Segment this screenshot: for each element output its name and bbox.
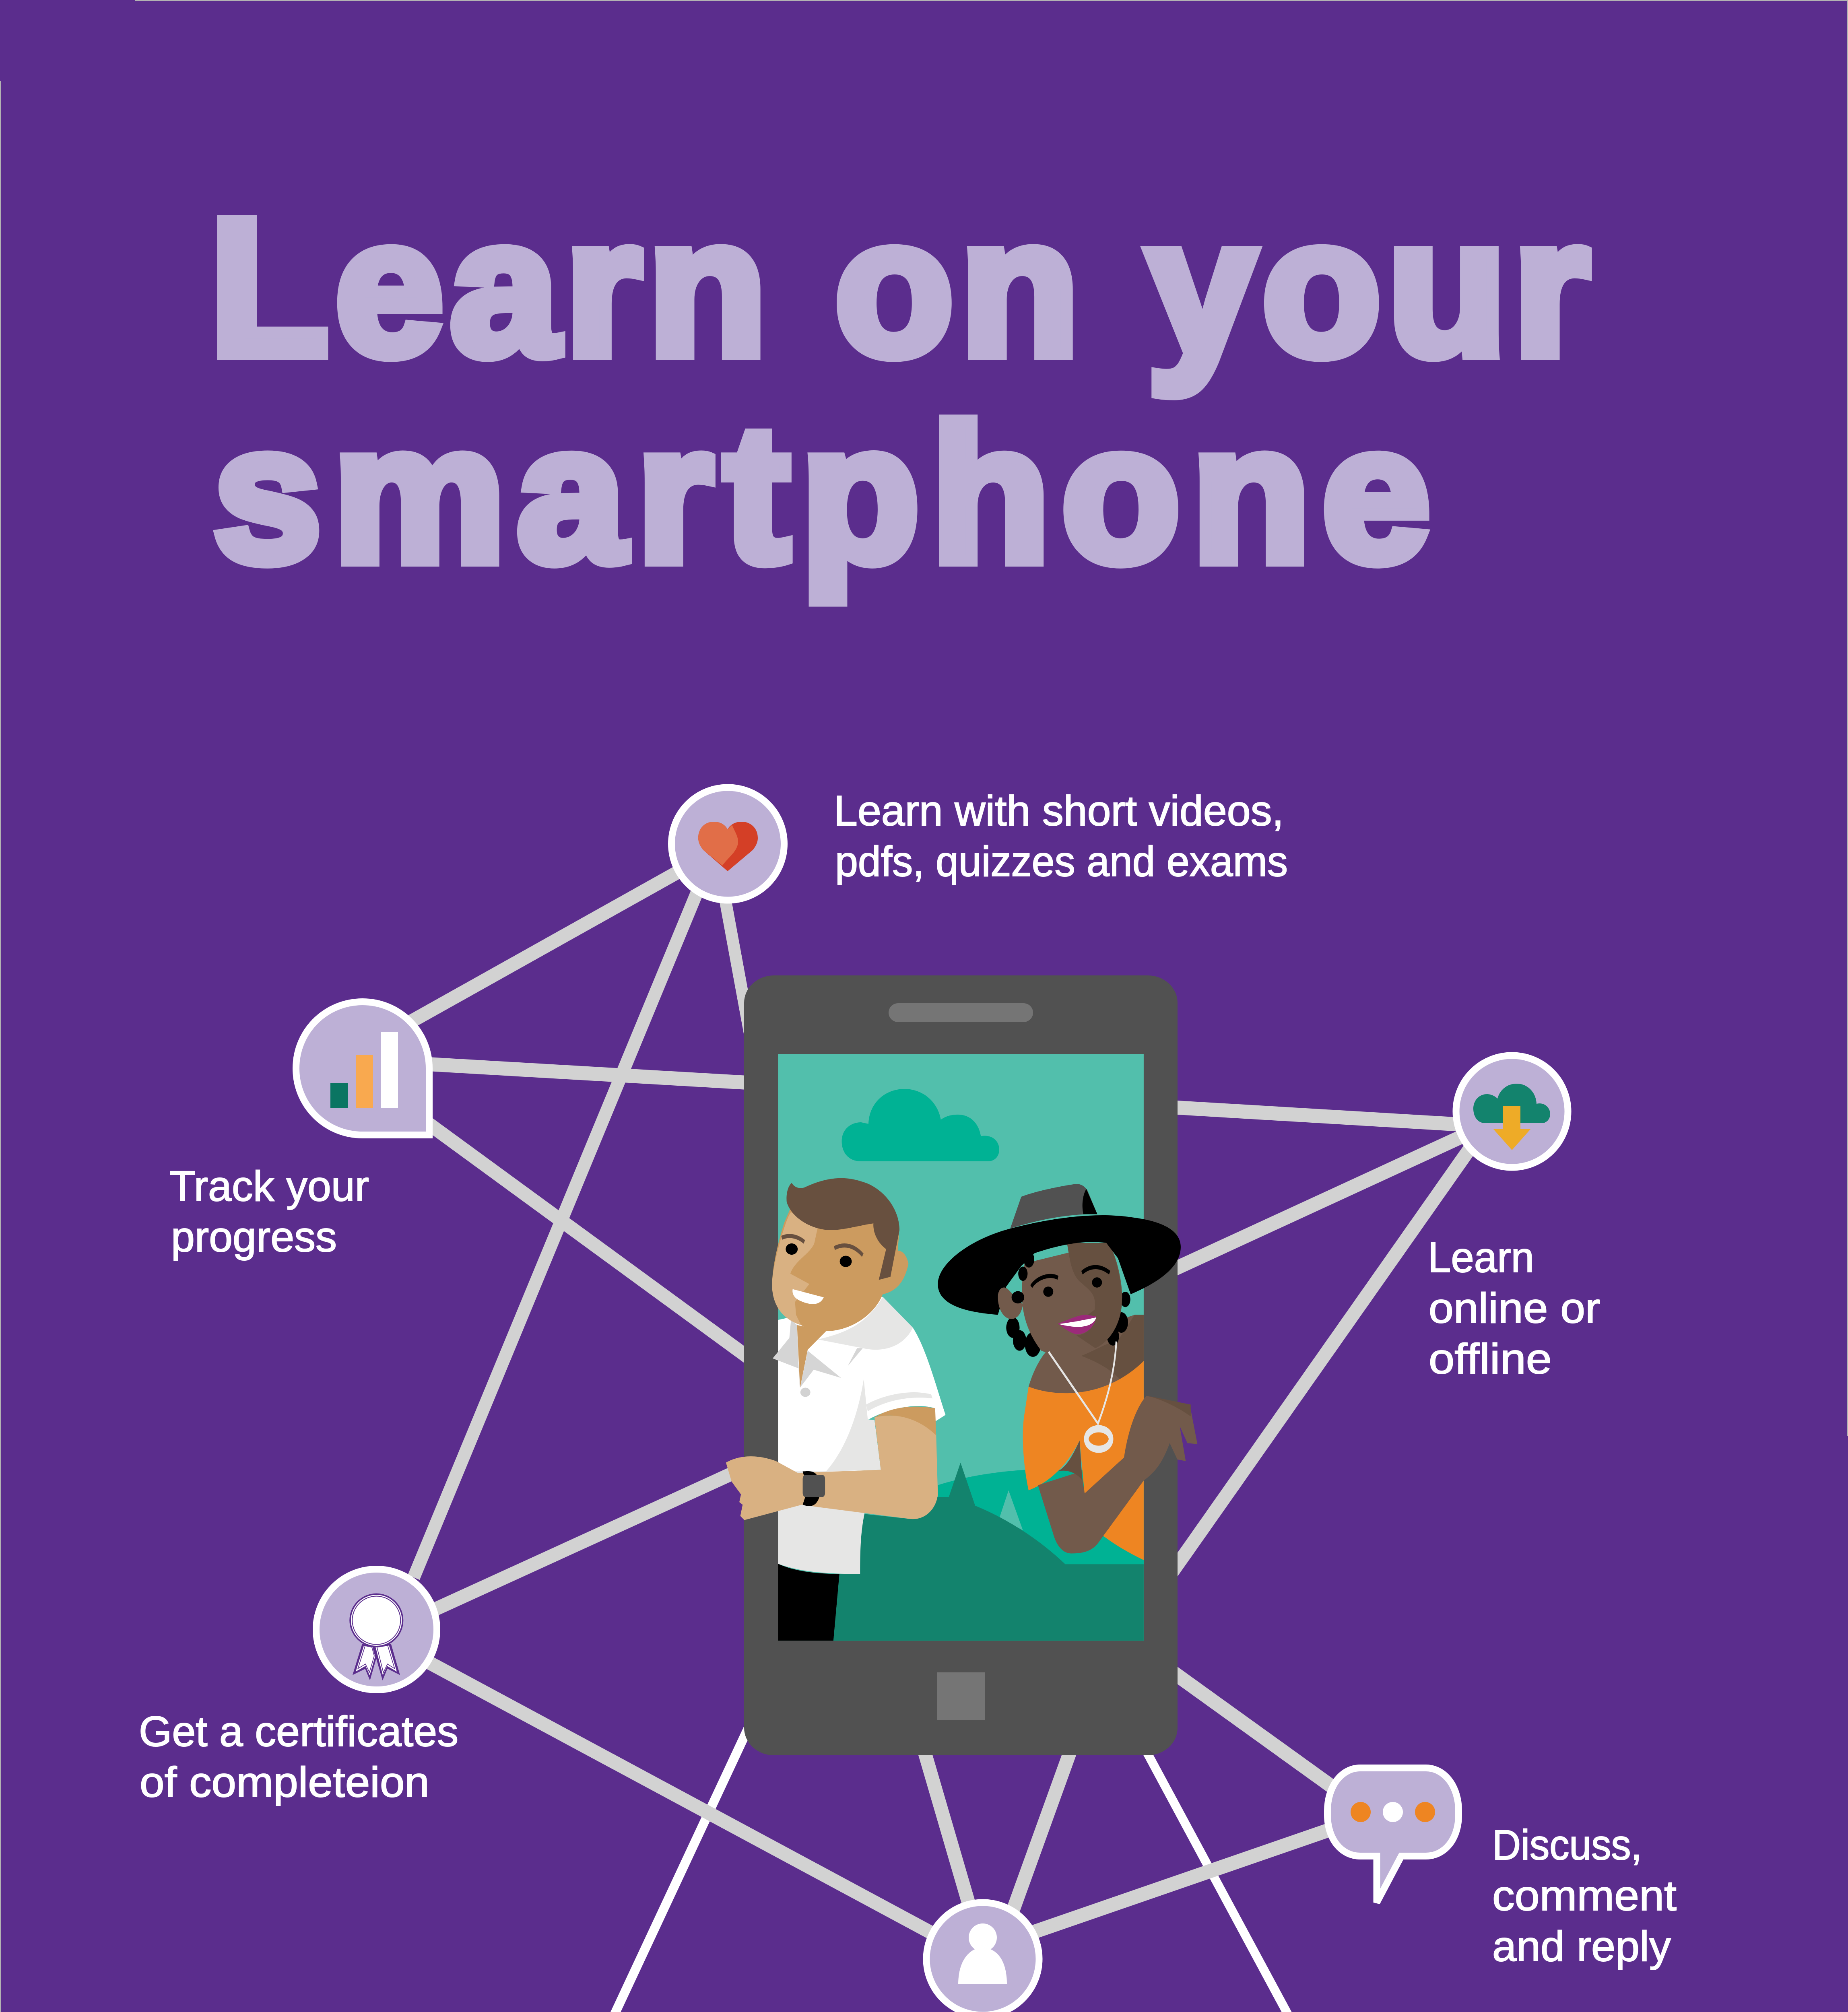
label: learn online or offline: Learn <box>1428 1234 1534 1281</box>
icon node: cloud download <box>1456 1055 1568 1167</box>
label: learn with short videos <box>834 787 1288 885</box>
label: learn with short videos: pdfs, quizzes and exams <box>835 838 1288 885</box>
icon node: person <box>926 1903 1039 2012</box>
label: discuss comment reply <box>1492 1821 1677 1970</box>
label: get a certificate: of completeion <box>140 1758 429 1806</box>
label: track your progress <box>169 1163 369 1261</box>
label: discuss comment reply: comment <box>1492 1872 1677 1919</box>
title <box>210 179 1589 603</box>
label: learn online or offline: online or <box>1429 1284 1600 1332</box>
label: learn online or offline: offline <box>1429 1335 1552 1383</box>
title: smartphone <box>214 385 1430 603</box>
label: discuss comment reply: Discuss, <box>1492 1821 1642 1869</box>
cloud <box>842 1089 999 1161</box>
icon node: chat bubble <box>1327 1768 1458 1903</box>
label: learn online or offline <box>1428 1234 1600 1383</box>
icon node: heart <box>671 787 784 900</box>
icon node: progress chart <box>296 1002 429 1135</box>
label: get a certificate <box>139 1708 458 1806</box>
title: Learn on your <box>210 179 1589 396</box>
white connector lines to outcome circles <box>513 1710 1409 2012</box>
network lines <box>363 844 1512 1960</box>
label: discuss comment reply: and reply <box>1492 1923 1671 1970</box>
label: track your progress: Track your <box>169 1163 369 1210</box>
woman with hat <box>938 1184 1197 1560</box>
icon node: certificate ribbon <box>316 1569 437 1690</box>
screen with illustrated people <box>726 1054 1197 1641</box>
home button <box>937 1672 985 1720</box>
man in white shirt <box>726 1178 945 1641</box>
phone <box>726 975 1197 1755</box>
label: track your progress: progress <box>171 1213 337 1261</box>
speaker <box>889 1003 1033 1022</box>
hills <box>833 1463 1144 1641</box>
label: get a certificate: Get a certificates <box>139 1708 458 1755</box>
label: learn with short videos: Learn with short videos, <box>834 787 1284 835</box>
